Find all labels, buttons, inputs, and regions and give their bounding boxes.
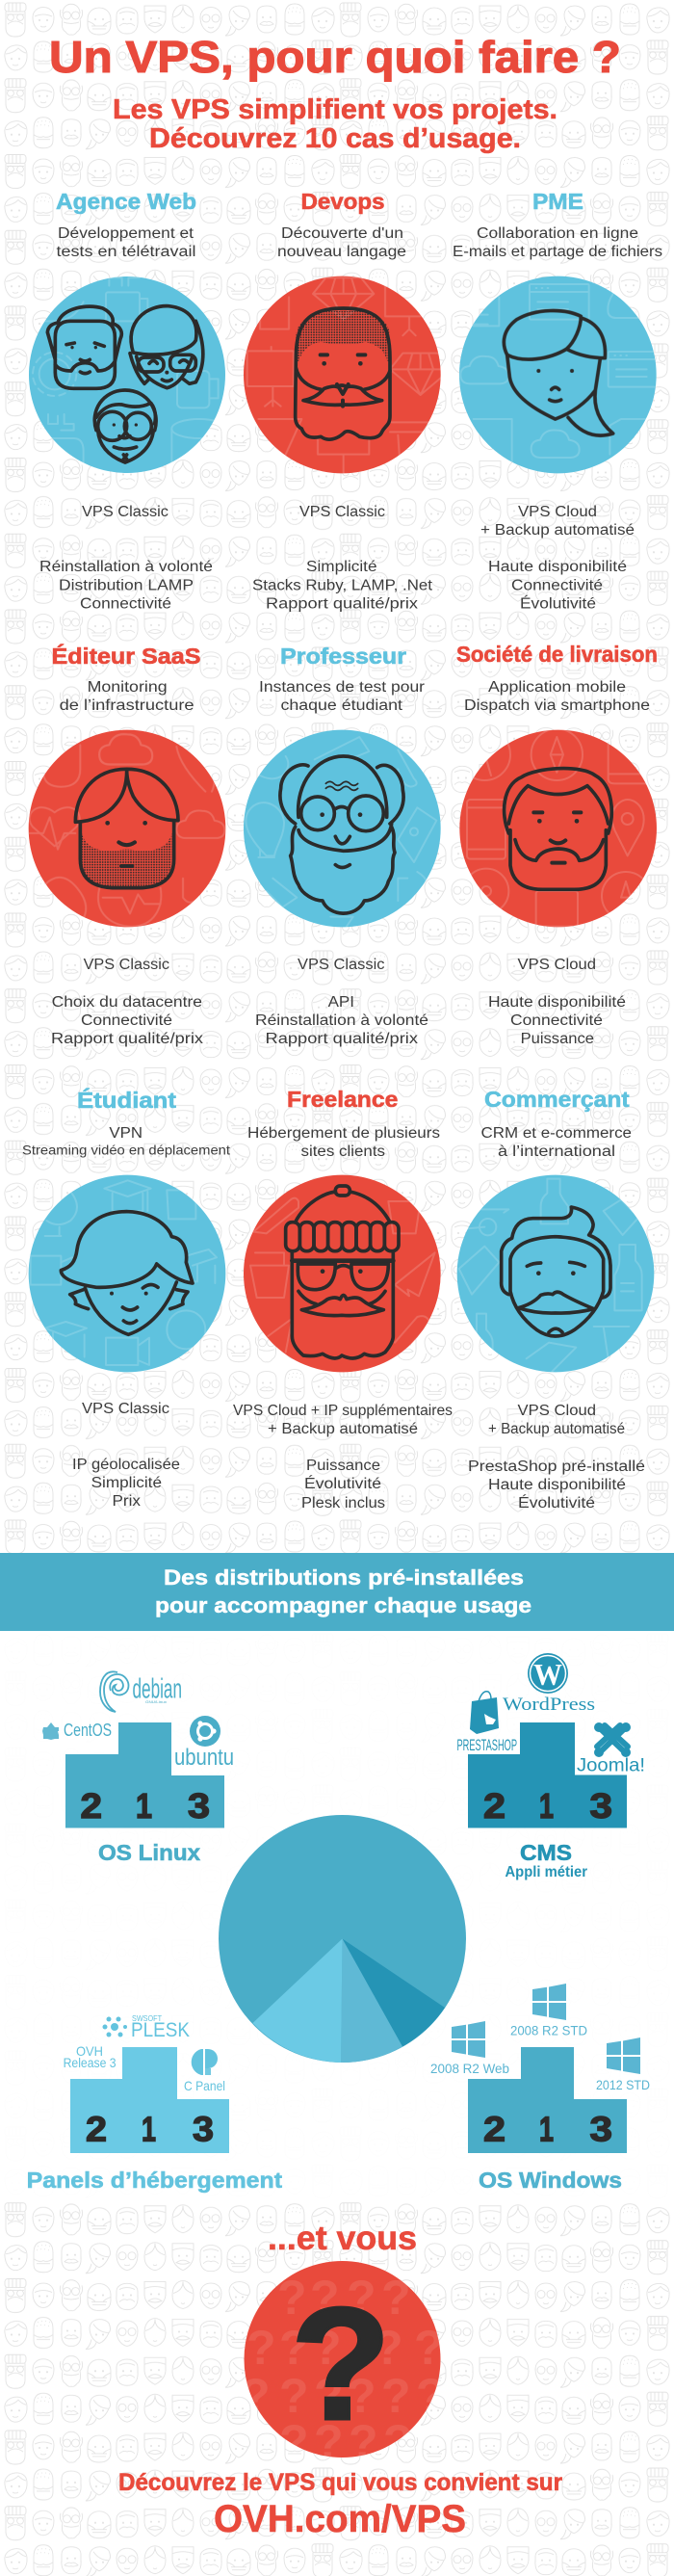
- icon: student winking in blue circle: [29, 1175, 225, 1372]
- VPS offer: VPS Classic: [299, 504, 385, 520]
- heading: Professeur: Professeur: [280, 644, 406, 669]
- features: Choix du datacentre: [52, 994, 202, 1011]
- icon: question mark in red circle: ?: [374, 2321, 403, 2375]
- icon: man with moustache in blue circle: [457, 1175, 654, 1372]
- rank numbers: 3: [589, 1786, 612, 1826]
- VPS offer: + Backup automatisé: [488, 1421, 625, 1437]
- features: [301, 1458, 385, 1511]
- VPS offer: [488, 1403, 625, 1437]
- icon: question mark in red circle: ?: [241, 2369, 271, 2423]
- description: [22, 1125, 230, 1158]
- banner: distributions: Des distributions pré-installées: [164, 1565, 524, 1590]
- logo: 2008 R2 Web: 2008 R2 Web: [430, 2061, 509, 2076]
- subtitle: [113, 94, 557, 154]
- logo: OVH Release 3: OVH: [76, 2043, 103, 2059]
- features: API: [328, 994, 354, 1011]
- description: CRM et e-commerce: [481, 1125, 632, 1142]
- features: Haute disponibilité: [488, 994, 626, 1011]
- logo: Joomla: [577, 1722, 645, 1776]
- features: Évolutivité: [304, 1476, 381, 1492]
- description: [247, 1125, 440, 1160]
- features: [252, 559, 433, 613]
- icon: hipster with beanie in red circle: [244, 1175, 441, 1372]
- panel: Commerçant: [457, 1087, 654, 1511]
- description: Développement et: [58, 225, 194, 242]
- heading: Commerçant: Commerçant: [484, 1087, 630, 1112]
- features: Évolutivité: [520, 595, 596, 613]
- icon: question mark in red circle: ?: [310, 2271, 340, 2325]
- features: Distribution LAMP: [59, 578, 194, 593]
- description: Monitoring: [88, 679, 168, 696]
- icon: question mark in red circle: ?: [381, 2369, 411, 2423]
- description: VPN: [109, 1125, 143, 1142]
- description: [56, 225, 196, 260]
- features: Haute disponibilité: [488, 559, 627, 575]
- VPS offer: [480, 504, 635, 539]
- icon: question mark in red circle: ?: [416, 2369, 446, 2423]
- VPS offer: + Backup automatisé: [268, 1421, 418, 1437]
- VPS offer: VPS Classic: [82, 504, 168, 520]
- features: [255, 994, 428, 1047]
- description: [277, 225, 406, 260]
- icon: question mark in red circle: ?: [277, 2271, 307, 2325]
- VPS offer: VPS Cloud: [518, 504, 597, 520]
- icon: bearded man in red circle: [244, 276, 451, 474]
- podium: OS Windows: [430, 1984, 650, 2193]
- rank numbers: 1: [539, 1786, 554, 1826]
- logo: C Panel: [184, 2049, 225, 2093]
- rank numbers: 2: [483, 1786, 506, 1826]
- logo: Joomla: Joomla!: [577, 1755, 645, 1776]
- icon: question mark in red circle: ?: [279, 2415, 309, 2469]
- podium steps: [468, 2047, 627, 2153]
- description: de l’infrastructure: [60, 697, 194, 714]
- heading: Étudiant: Étudiant: [77, 1087, 176, 1113]
- description: Streaming vidéo en déplacement: [22, 1143, 230, 1158]
- description: Dispatch via smartphone: [464, 697, 650, 714]
- description: sites clients: [300, 1143, 385, 1160]
- rank numbers: 3: [188, 1786, 210, 1826]
- features: [488, 559, 627, 613]
- panel: Agence Web: [29, 189, 226, 613]
- description: E-mails et partage de fichiers: [453, 244, 662, 260]
- logo: OVH Release 3: [64, 2043, 117, 2070]
- podium steps: [70, 2047, 229, 2153]
- rank numbers: 3: [193, 2110, 214, 2148]
- description: nouveau langage: [277, 244, 406, 260]
- rank numbers: 1: [539, 2110, 554, 2148]
- rank numbers: 2: [483, 2110, 506, 2148]
- description: [453, 225, 662, 260]
- rank numbers: 2: [86, 2110, 107, 2148]
- VPS offer: [233, 1403, 453, 1437]
- logo: 2008 R2 STD: 2008 R2 STD: [510, 2023, 587, 2038]
- logo: CentOS: CentOS: [64, 1721, 112, 1740]
- features: Haute disponibilité: [488, 1477, 626, 1493]
- logo: WordPress: W: [533, 1657, 562, 1692]
- icon: bearded man in red circle: [459, 729, 657, 927]
- VPS offer: VPS Cloud: [518, 1403, 596, 1419]
- features: Connectivité: [80, 595, 171, 613]
- rank numbers: [483, 1786, 612, 1826]
- heading: Freelance: Freelance: [287, 1087, 398, 1112]
- icon: question mark in red circle: ?: [414, 2321, 444, 2375]
- title: Un VPS, pour quoi faire ?: [49, 32, 621, 82]
- rank numbers: [81, 1786, 210, 1826]
- logo: Plesk: [102, 2013, 190, 2041]
- rank numbers: 3: [589, 2110, 612, 2148]
- rank numbers: [86, 2110, 214, 2148]
- label: OS Linux: OS Linux: [98, 1840, 200, 1865]
- description: chaque étudiant: [281, 697, 403, 714]
- call to action: Découvrez le VPS qui vous convient sur: [118, 2469, 562, 2496]
- logo: Plesk: PLESK: [131, 2019, 190, 2041]
- heading: Agence Web: Agence Web: [56, 189, 196, 214]
- features: Stacks Ruby, LAMP, .Net: [252, 578, 433, 593]
- features: IP géolocalisée: [72, 1457, 180, 1473]
- icon: question mark in red circle: ?: [349, 2415, 378, 2469]
- icon: question mark in red circle: ?: [291, 2275, 391, 2454]
- icon: question mark in red circle: ?: [314, 2415, 344, 2469]
- VPS offer: VPS Cloud: [518, 957, 596, 973]
- logo: WordPress: WordPress: [503, 1695, 595, 1715]
- features: [72, 1457, 180, 1510]
- label: Panels d'hébergement: Panels d’hébergement: [27, 2168, 282, 2193]
- features: Prix: [112, 1493, 141, 1510]
- description: Instances de test pour: [259, 679, 425, 696]
- logo: CentOS: [42, 1721, 112, 1740]
- description: Collaboration en ligne: [477, 225, 638, 242]
- heading: Éditeur SaaS: Éditeur SaaS: [52, 643, 200, 669]
- features: Plesk inclus: [301, 1495, 385, 1511]
- features: [468, 1459, 645, 1511]
- panel: Étudiant: [22, 1087, 230, 1510]
- rank numbers: [483, 2110, 612, 2148]
- logo: 2008 R2 Web: [430, 2021, 509, 2076]
- icon: question mark in red circle: [241, 2261, 446, 2469]
- features: Puissance: [521, 1031, 594, 1047]
- rank numbers: 1: [136, 1786, 152, 1826]
- logo: debian: debian: [133, 1674, 182, 1705]
- features: Puissance: [306, 1458, 380, 1474]
- icon: woman in blue circle: [459, 276, 667, 473]
- description: tests en télétravail: [56, 244, 196, 260]
- logo: 2012 STD: 2012 STD: [596, 2077, 650, 2092]
- icon: question mark in red circle: ?: [347, 2271, 376, 2325]
- banner: distributions: pour accompagner chaque usage: [155, 1593, 531, 1617]
- description: [464, 679, 650, 714]
- label: OS Windows: OS Windows: [479, 2168, 622, 2193]
- description: Application mobile: [488, 679, 626, 696]
- features: Évolutivité: [518, 1495, 595, 1511]
- heading: Devops: Devops: [300, 189, 385, 214]
- link: OVH.com/VPS: OVH.com/VPS: [214, 2498, 466, 2540]
- features: Réinstallation à volonté: [255, 1012, 428, 1029]
- faded section background: [0, 1631, 674, 2199]
- features: Simplicité: [306, 559, 377, 575]
- heading: et vous: ...et vous: [268, 2220, 417, 2257]
- podium steps: [468, 1722, 627, 1828]
- panel: Professeur: [244, 644, 441, 1047]
- logo: Plesk: SWSOFT: [132, 2013, 162, 2023]
- subtitle: Les VPS simplifient vos projets.: [113, 94, 557, 125]
- label: CMS: CMS: [520, 1840, 572, 1865]
- icon: question mark in red circle: ?: [312, 2321, 342, 2375]
- features: Rapport qualité/prix: [51, 1031, 203, 1047]
- logo: debian: [100, 1671, 182, 1712]
- podium: CMS: [456, 1653, 645, 1880]
- description: à l’international: [498, 1143, 615, 1160]
- panel: Éditeur SaaS: [29, 643, 225, 1047]
- features: Rapport qualité/prix: [266, 595, 418, 613]
- description: [481, 1125, 632, 1160]
- podium: Panels d'hébergement: [27, 2013, 282, 2193]
- logo: 2008 R2 STD: [510, 1984, 587, 2038]
- logo: C Panel: C Panel: [184, 2078, 225, 2093]
- podium steps: [65, 1722, 224, 1828]
- logo: OVH Release 3: Release 3: [64, 2056, 117, 2070]
- features: Connectivité: [81, 1012, 172, 1029]
- logo: ubuntu: [174, 1716, 234, 1771]
- logo: PrestaShop: PRESTASHOP: [456, 1736, 517, 1754]
- panel: Freelance: [233, 1087, 453, 1511]
- logo: debian: GNU/Linux: [145, 1699, 167, 1704]
- subtitle: Découvrez 10 cas d’usage.: [149, 123, 521, 154]
- icon: question mark in red circle: ?: [279, 2369, 309, 2423]
- description: Découverte d'un: [281, 225, 403, 242]
- features: [39, 559, 213, 613]
- logo: PrestaShop: [456, 1692, 517, 1754]
- panel: PME: [453, 189, 667, 613]
- banner: distributions: [0, 1553, 674, 1631]
- features: PrestaShop pré-installé: [468, 1459, 645, 1475]
- panel: Devops: [244, 189, 451, 613]
- features: [51, 994, 203, 1047]
- panel: Société de livraison: [456, 642, 658, 1047]
- icon: question mark in red circle: ?: [314, 2369, 344, 2423]
- rank numbers: 2: [81, 1786, 102, 1826]
- rank numbers: 1: [142, 2110, 156, 2148]
- icon: question mark in red circle: ?: [279, 2321, 309, 2375]
- description: [60, 679, 194, 714]
- icon: three faces in blue circle: [29, 276, 226, 473]
- icon: question mark in red circle: ?: [381, 2271, 411, 2325]
- icon: old professor in blue circle: [244, 730, 441, 927]
- description: [259, 679, 425, 714]
- VPS offer: VPS Cloud + IP supplémentaires: [233, 1403, 453, 1419]
- icon: man with stubble in red circle: [29, 730, 225, 927]
- features: Simplicité: [91, 1475, 162, 1491]
- sublabel: Appli métier: Appli métier: [505, 1864, 587, 1880]
- icon: question mark in red circle: ?: [383, 2415, 413, 2469]
- description: Hébergement de plusieurs: [247, 1125, 440, 1142]
- logo: WordPress: [503, 1653, 595, 1715]
- features: Connectivité: [510, 1012, 603, 1029]
- VPS offer: VPS Classic: [82, 1401, 169, 1417]
- podium: OS Linux: [42, 1671, 234, 1865]
- VPS offer: VPS Classic: [298, 957, 385, 973]
- heading: PME: PME: [532, 189, 583, 214]
- heading: Société de livraison: Société de livraison: [456, 642, 658, 667]
- features: Connectivité: [511, 578, 603, 593]
- VPS offer: VPS Classic: [84, 957, 169, 973]
- logo: ubuntu: ubuntu: [174, 1745, 234, 1771]
- logo: 2012 STD: [596, 2037, 650, 2092]
- icon: question mark in red circle: ?: [246, 2321, 276, 2375]
- pie chart: [219, 1815, 466, 2063]
- icon: question mark in red circle: ?: [347, 2369, 376, 2423]
- VPS offer: + Backup automatisé: [480, 522, 635, 539]
- features: Rapport qualité/prix: [266, 1031, 418, 1047]
- features: [488, 994, 626, 1047]
- features: Réinstallation à volonté: [39, 559, 213, 575]
